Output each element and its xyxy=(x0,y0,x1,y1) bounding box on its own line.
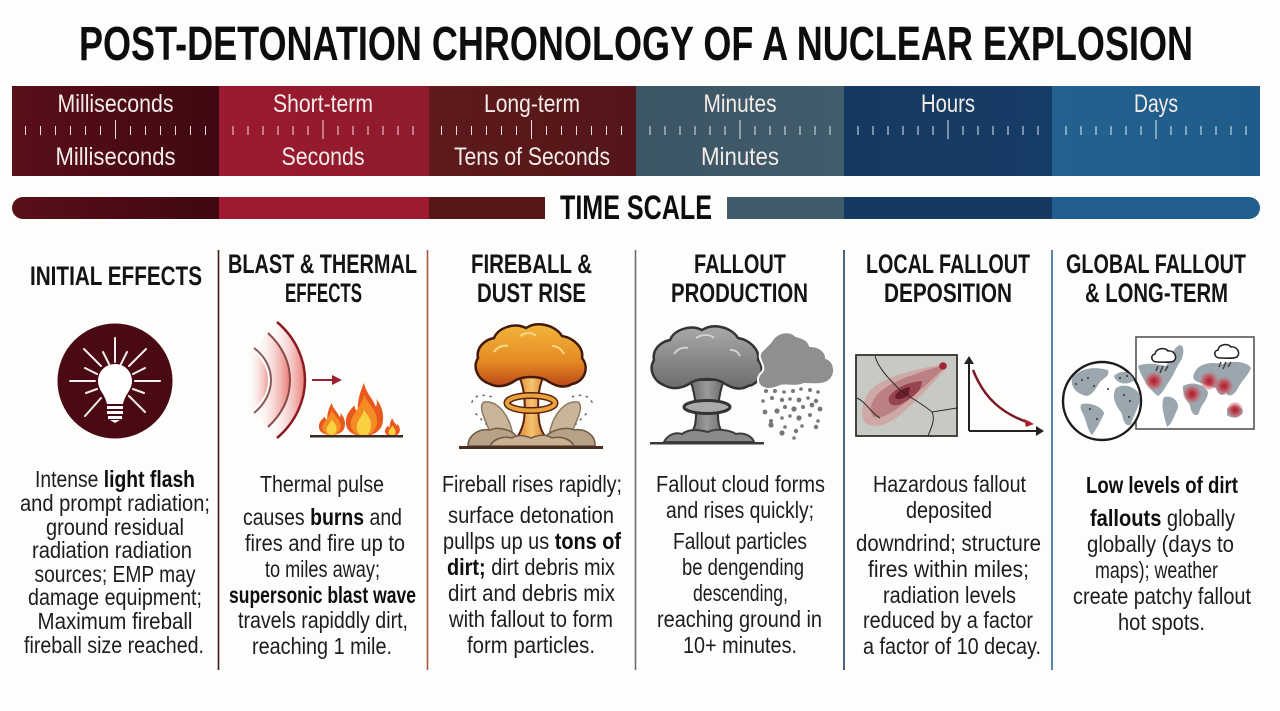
time scale bar xyxy=(12,189,1260,227)
description: descending, xyxy=(693,580,788,606)
heading: DEPOSITION xyxy=(884,278,1012,308)
description: fallouts globally xyxy=(1090,505,1235,531)
heading: DUST RISE xyxy=(477,278,586,308)
heading: EFFECTS xyxy=(285,278,362,308)
description: to miles away; xyxy=(265,556,380,582)
heading xyxy=(228,249,417,308)
description: fires and fire up to xyxy=(245,530,405,556)
description: fireball size reached. xyxy=(24,632,204,658)
description: form particles. xyxy=(467,632,595,658)
heading: FALLOUT xyxy=(694,249,786,279)
description: fires within miles; xyxy=(868,556,1029,582)
icon: blast waves xyxy=(247,322,305,438)
description xyxy=(229,471,416,659)
icon: light bulb xyxy=(58,324,172,438)
description: reaching 1 mile. xyxy=(252,633,392,659)
heading xyxy=(671,249,808,308)
band segment: days xyxy=(1052,86,1260,176)
band segment: hours xyxy=(844,86,1052,176)
hot spots xyxy=(1145,372,1243,418)
panel: fireball and dust rise xyxy=(442,249,622,658)
description: be dengending xyxy=(682,554,804,580)
heading xyxy=(866,249,1030,308)
description: radiation levels xyxy=(883,582,1016,608)
rain clouds xyxy=(1152,345,1239,373)
description: hot spots. xyxy=(1118,609,1205,635)
description: damage equipment; xyxy=(28,584,202,610)
description: and rises quickly; xyxy=(666,497,814,523)
icon: grey mushroom cloud xyxy=(650,326,834,444)
heading: PRODUCTION xyxy=(671,278,808,308)
description xyxy=(856,471,1041,659)
icon: globe xyxy=(1063,362,1141,440)
band segment: hours: Hours xyxy=(921,90,975,118)
description: dirt and debris mix xyxy=(448,580,615,606)
band segment: milliseconds: Milliseconds xyxy=(58,90,174,118)
description: travels rapiddly dirt, xyxy=(238,607,408,633)
band segment: tens of seconds xyxy=(429,86,636,176)
heading: & LONG-TERM xyxy=(1085,278,1228,308)
band segment: minutes xyxy=(636,86,844,176)
description xyxy=(442,471,622,658)
heading: INITIAL EFFECTS xyxy=(30,261,202,291)
description: causes burns and xyxy=(243,504,402,530)
description: a factor of 10 decay. xyxy=(863,633,1041,659)
description: Fallout cloud forms xyxy=(656,471,825,497)
description: with fallout to form xyxy=(448,606,613,632)
band segment: minutes: Minutes xyxy=(704,90,776,118)
description: radiation radiation xyxy=(32,537,192,563)
description: sources; EMP may xyxy=(34,561,196,587)
band segment: milliseconds xyxy=(12,86,219,176)
band segment: seconds: Seconds xyxy=(282,143,364,171)
description xyxy=(20,466,210,658)
band segment: milliseconds: Milliseconds xyxy=(56,143,176,171)
heading xyxy=(1066,249,1246,308)
description: dirt; dirt debris mix xyxy=(447,554,615,580)
description: supersonic blast wave xyxy=(229,582,416,608)
band segment: days: Days xyxy=(1134,90,1178,118)
icon: rain cloud xyxy=(758,332,834,389)
description: globally (days to xyxy=(1087,531,1234,557)
description: Hazardous fallout xyxy=(873,471,1027,497)
description: Intense light flash xyxy=(35,466,195,492)
heading: FIREBALL & xyxy=(471,249,592,279)
band segment: seconds xyxy=(219,86,429,176)
band segment: minutes: Minutes xyxy=(701,143,779,171)
icon: world map xyxy=(1136,337,1254,429)
description: Low levels of dirt xyxy=(1086,472,1238,498)
description: maps); weather xyxy=(1095,557,1218,583)
description xyxy=(1073,472,1252,635)
description: Thermal pulse xyxy=(260,471,384,497)
description: Maximum fireball xyxy=(38,608,192,634)
column dividers xyxy=(218,250,1052,670)
band segment: tens of seconds: Tens of Seconds xyxy=(454,143,610,171)
heading xyxy=(471,249,592,308)
panel: global fallout and long-term xyxy=(1063,249,1254,635)
chart: decay curve xyxy=(964,356,1044,436)
panel: initial effects xyxy=(20,261,210,658)
panel: local fallout deposition xyxy=(856,249,1044,659)
description: pullps up us tons of xyxy=(443,528,621,554)
icon: fallout plume map xyxy=(856,355,957,436)
arrow xyxy=(312,375,342,385)
description xyxy=(656,471,825,658)
description: downdrind; structure xyxy=(856,530,1041,556)
description: surface detonation xyxy=(448,502,614,528)
band segment: seconds: Short-term xyxy=(273,90,373,118)
description: Fireball rises rapidly; xyxy=(442,471,622,497)
heading: BLAST & THERMAL xyxy=(228,249,417,279)
description: ground residual xyxy=(46,514,184,540)
description: and prompt radiation; xyxy=(20,490,210,516)
band segment: tens of seconds: Long-term xyxy=(484,90,580,118)
icon: mushroom cloud xyxy=(459,324,603,449)
description: Fallout particles xyxy=(673,528,807,554)
heading: LOCAL FALLOUT xyxy=(866,249,1030,279)
panel: blast and thermal effects xyxy=(228,249,417,659)
timeline band xyxy=(12,86,1260,176)
description: reaching ground in xyxy=(657,606,822,632)
description: create patchy fallout xyxy=(1073,583,1252,609)
description: 10+ minutes. xyxy=(683,632,797,658)
description: reduced by a factor xyxy=(863,607,1033,633)
time scale bar: TIME SCALE xyxy=(560,189,712,227)
panel: fallout production xyxy=(650,249,834,658)
icon: flames xyxy=(310,383,403,438)
description: deposited xyxy=(906,497,992,523)
